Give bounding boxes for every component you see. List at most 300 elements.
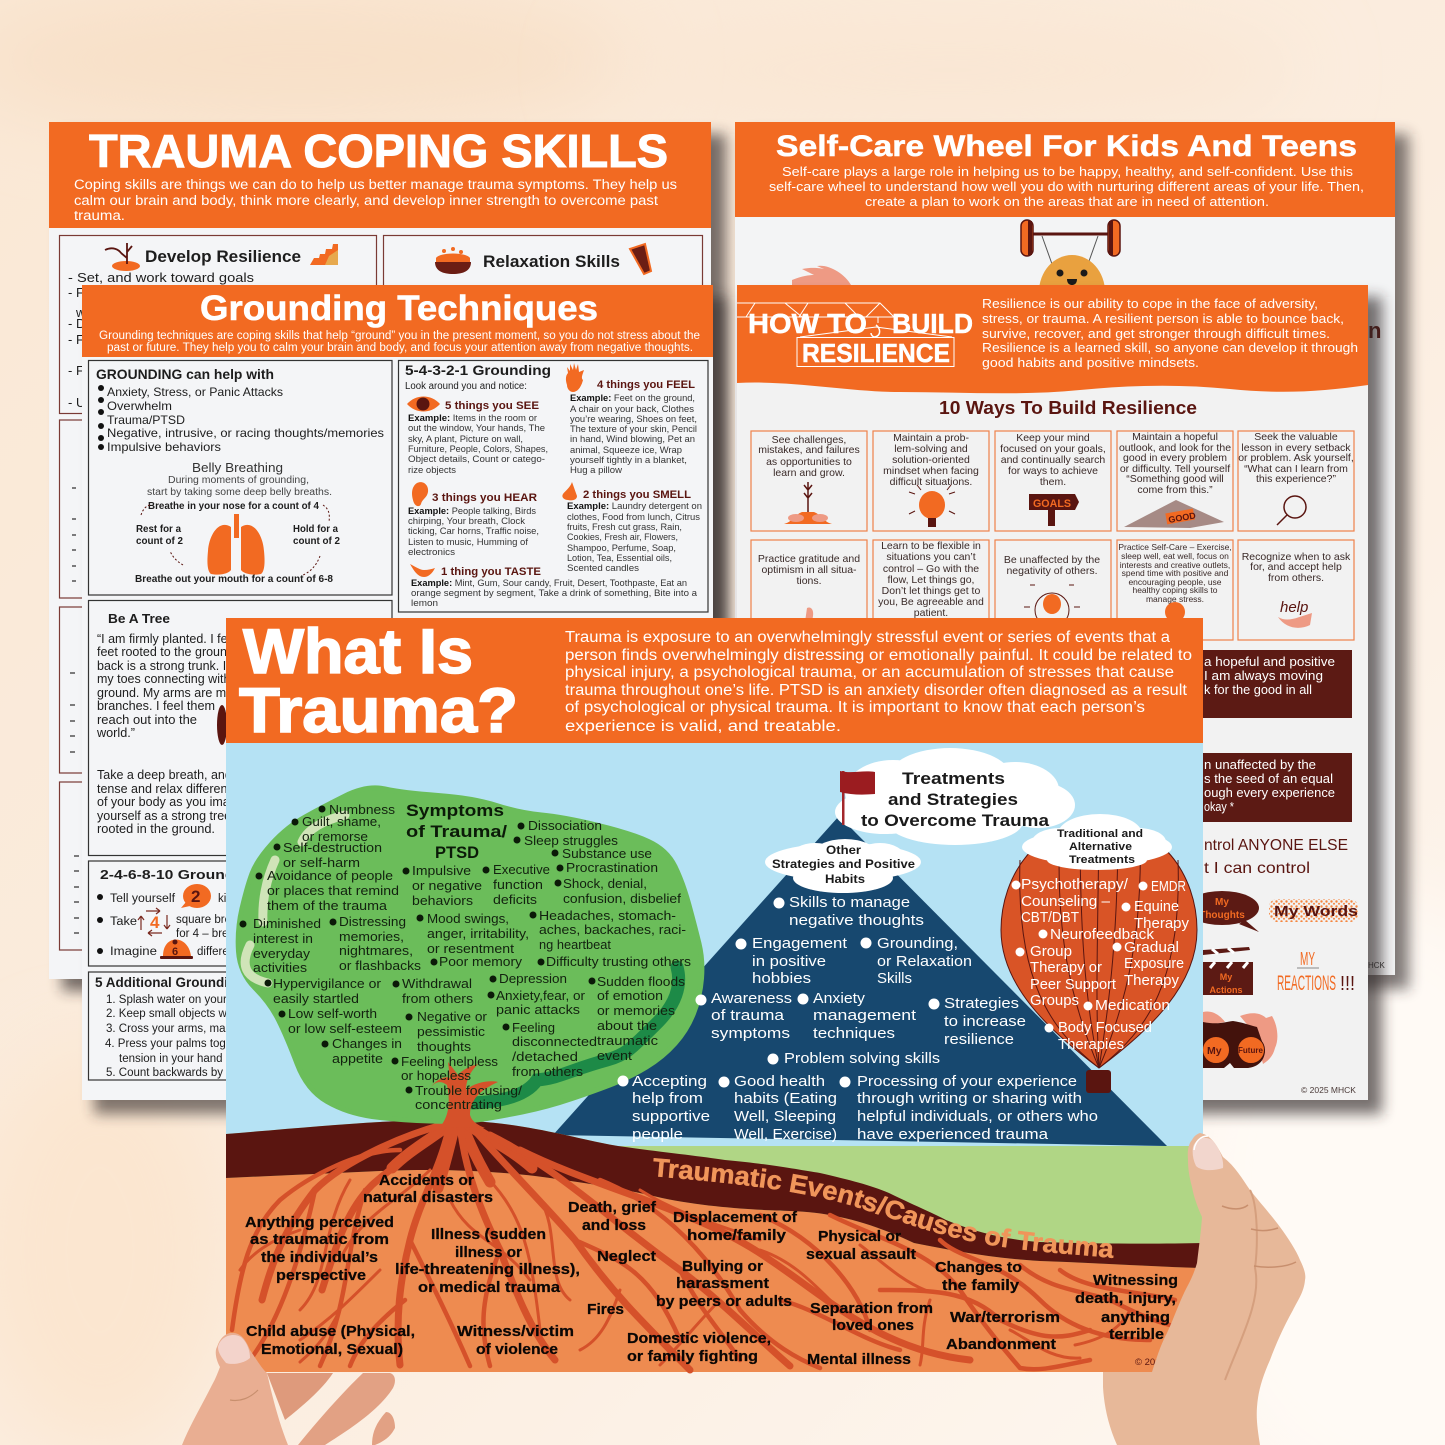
symptom text: Mood swings, — [427, 911, 509, 926]
symptom text: or low self-esteem — [288, 1021, 402, 1036]
symptom text: Changes in — [332, 1036, 402, 1051]
balloon text: Exposure — [1124, 956, 1184, 972]
mountain strategy list — [618, 894, 1098, 1143]
coping description: calm our brain and body, think more clearly, and develop inner strength to overcome past — [74, 193, 658, 208]
my reactions: MY — [1300, 949, 1315, 969]
mountain strategy list: to increase — [944, 1013, 1026, 1030]
my words: My Words — [1274, 903, 1358, 920]
symptom text: /detached — [512, 1049, 578, 1064]
cards row 1: as opportunities to — [766, 456, 852, 468]
symptom text: everyday — [253, 946, 311, 961]
highlights — [245, 815, 345, 983]
symptom text — [253, 802, 692, 1112]
poster: trauma coping skills — [49, 122, 726, 991]
panel: 2-4-6-8-10 grounding: different — [197, 946, 239, 958]
panel: be a tree: Be A Tree — [108, 611, 170, 626]
dark banner: hopeful — [1100, 650, 1352, 718]
cards row 2: Don’t let things get to — [882, 585, 980, 597]
symptom text: function — [493, 877, 543, 892]
cards row 1: Maintain a hopeful — [1132, 431, 1218, 443]
panel: 5-4-3-2-1 grounding — [398, 360, 708, 612]
panel: 5 additional grounding: 5 Additional Grounding — [95, 975, 244, 990]
symptom text: Sleep struggles — [524, 833, 619, 848]
symptom text: or remorse — [302, 829, 368, 844]
panel: relaxation skills — [384, 236, 702, 296]
panel: 5 additional grounding: 3. Cross your arms, mak — [106, 1023, 231, 1035]
cards row 2: manage stress. — [1146, 594, 1204, 604]
mountain strategy list: Skills to manage — [789, 894, 910, 911]
balloon text: Therapy — [1124, 973, 1180, 989]
my thoughts bubble: Thoughts — [1199, 910, 1245, 921]
symptoms heading: of Trauma/ — [406, 822, 507, 841]
symptom text: or resentment — [427, 941, 514, 956]
cloud: treatments and strategies — [835, 748, 1075, 845]
panel: 5-4-3-2-1 grounding: Example: Items in the room or — [408, 413, 537, 423]
panel: 5-4-3-2-1 grounding: Lotion, Tea, Essential oils, — [567, 553, 672, 563]
symptom text: easily startled — [273, 991, 359, 1006]
panel: 5-4-3-2-1 grounding: The texture of your skin, Pencil — [570, 424, 697, 434]
panel: grounding can help with — [88, 360, 392, 595]
intro paragraph: experience is valid, and treatable. — [565, 718, 841, 735]
symptom text: behaviors — [412, 893, 474, 908]
cards row 2: negativity of others. — [1006, 565, 1098, 577]
mountain strategy list: Engagement — [752, 935, 848, 952]
resilience description: survive, recover, and get stronger through difficult times. — [982, 326, 1330, 341]
cards row 2: Practice Self-Care – Exercise, — [1118, 542, 1232, 552]
cards row 1: Keep your mind — [1016, 432, 1090, 444]
causes of trauma list: terrible — [1109, 1326, 1164, 1343]
cards row 2: tions. — [796, 575, 822, 587]
balloon text: Neurofeedback — [1050, 927, 1155, 943]
cards row 1: “Something good will — [1126, 473, 1224, 485]
self-care description: Self-care plays a large role in helping us to be happy, healthy, and self-confident. Use this — [782, 164, 1354, 179]
resilience description: stress, or trauma. A resilient person is able to bounce back, — [982, 311, 1344, 326]
balloon text: Therapy — [1134, 916, 1190, 932]
panel: 5-4-3-2-1 grounding: 5 things you SEE — [445, 400, 539, 412]
symptom text: Negative or — [417, 1009, 488, 1024]
panel: 5-4-3-2-1 grounding: Look around you and notice: — [405, 381, 527, 392]
belly breathing diagram — [135, 460, 340, 585]
panel: be a tree: of your body as you imagine — [97, 795, 253, 809]
icon: square breath 4: 4 — [150, 913, 160, 932]
cards row 1: outlook, and look for the — [1119, 442, 1231, 454]
panel: be a tree: Take a deep breath, and — [97, 768, 232, 782]
icon: cloche 6: 6 — [172, 946, 178, 958]
mountain strategy list: or Relaxation — [877, 953, 972, 970]
mountain strategy list: in positive — [752, 953, 826, 970]
panel: be a tree: rooted in the ground. — [97, 822, 215, 836]
panel: 2-4-6-8-10 grounding — [88, 861, 392, 966]
symptom text: Withdrawal — [402, 976, 472, 991]
finger: middle — [298, 1373, 395, 1445]
panel: 5 additional grounding: 4. Press your palms toge — [105, 1038, 232, 1050]
mountain strategy list: people — [632, 1126, 683, 1143]
panel: be a tree: back is a strong trunk. I feel — [97, 659, 250, 673]
causes of trauma list: Physical or — [818, 1228, 901, 1245]
panel: develop resilience: - U — [68, 395, 85, 410]
tree crown — [238, 788, 702, 1128]
belly breathing diagram: Hold for a — [293, 523, 338, 535]
causes of trauma list: illness or — [455, 1244, 522, 1261]
cards row 2: control – Go with the — [883, 563, 979, 575]
intro paragraph: Trauma is exposure to an overwhelmingly stressful event or series of events that a — [565, 629, 1170, 646]
icon: goals sign: GOALS — [1033, 498, 1071, 510]
intro paragraph: physical injury, a psychological trauma, or an accumulation of stresses that cause — [565, 664, 1174, 681]
mountain strategy list: Awareness — [711, 990, 792, 1007]
causes of trauma list: anything — [1101, 1309, 1170, 1326]
main title — [239, 617, 518, 746]
panel: 5 additional grounding: 1. Splash water on your — [106, 994, 227, 1006]
coping description — [74, 177, 677, 223]
dark banner: unaffected: okay * — [1204, 799, 1234, 814]
cloud: traditional and alternative: Treatments — [1069, 854, 1135, 866]
symptom text: Procrastination — [566, 860, 658, 875]
balloon text: Groups — [1030, 993, 1079, 1009]
causes of trauma list: Witnessing — [1093, 1272, 1178, 1289]
grounding description: Grounding techniques are coping skills that help “ground” you in the present moment, so you do not stress about the — [99, 330, 700, 342]
balloon text: EMDR — [1151, 879, 1186, 895]
symptom text: Difficulty trusting others — [546, 954, 692, 969]
symptom text: Headaches, stomach- — [539, 908, 676, 923]
control text — [1204, 837, 1348, 877]
panel: be a tree: my toes connecting with the — [97, 672, 251, 686]
causes of trauma list: Separation from — [810, 1300, 933, 1317]
causes of trauma list: Fires — [587, 1301, 624, 1318]
my future binoculars: My — [1207, 1045, 1222, 1057]
belly breathing diagram: Belly Breathing — [192, 460, 283, 475]
my actions clapboard — [1203, 947, 1253, 995]
cards row 2: encouraging people, use — [1128, 577, 1222, 587]
icon: help hand — [1278, 599, 1312, 628]
cards row 1: this experience?” — [1256, 473, 1336, 485]
symptom text: Sudden floods — [597, 974, 686, 989]
belly breathing diagram: count of 2 — [293, 535, 340, 547]
causes of trauma list: Emotional, Sexual) — [261, 1341, 403, 1358]
cards row 2: Practice gratitude and — [758, 553, 860, 565]
cloud: treatments and strategies: and Strategies — [888, 790, 1018, 809]
mountain strategy list: Good health — [734, 1073, 825, 1090]
cloud: treatments and strategies: Treatments — [902, 769, 1005, 788]
cards row 1: Seek the valuable — [1254, 431, 1338, 443]
self-care description: create a plan to work on the areas that are in need of attention. — [865, 194, 1269, 209]
panel: develop resilience — [60, 236, 376, 414]
cards row 1: or difficulty. Tell yourself — [1120, 463, 1230, 475]
cards row 2: spend time with positive and — [1122, 568, 1229, 578]
symptom text: from others — [512, 1064, 584, 1079]
dark banner: hopeful: I am always moving — [1204, 668, 1323, 683]
panel: 5-4-3-2-1 grounding: A chair on your back, Clothes — [570, 404, 694, 414]
panel: be a tree: branches. I feel them — [97, 699, 215, 713]
icon: help hand: help — [1280, 599, 1308, 616]
panel: develop resilience: - D — [68, 316, 85, 331]
hot air balloon — [1001, 822, 1197, 1093]
my words — [1269, 899, 1358, 922]
icon: cloche 6 — [160, 940, 193, 959]
icon: hand — [566, 363, 584, 392]
my actions clapboard: Actions — [1209, 985, 1243, 995]
intro paragraph — [565, 629, 1192, 735]
causes of trauma list: perspective — [276, 1267, 366, 1284]
cards row 1: Maintain a prob- — [893, 432, 969, 444]
panel: 5-4-3-2-1 grounding: electronics — [408, 547, 455, 557]
panel: grounding can help with: Trauma/PTSD — [107, 413, 185, 427]
dark banner: unaffected: s the seed of an equal — [1204, 771, 1333, 786]
trunk and branches — [430, 1062, 498, 1128]
belly breathing diagram: During moments of grounding, — [168, 475, 309, 486]
panel: 5 additional grounding — [88, 972, 392, 1080]
panel: be a tree: “I am firmly planted. I feel my — [97, 632, 258, 646]
header bar — [226, 617, 1203, 746]
cards row 2 — [751, 540, 1354, 640]
panel: be a tree: tense and relax different parts — [97, 782, 262, 796]
cards row 1: solution-oriented — [892, 454, 970, 466]
mountain strategy list: Well, Sleeping — [734, 1108, 836, 1125]
panel: 5 additional grounding: 5. Count backwards by — [106, 1067, 223, 1079]
icon: speech bubble 2 — [181, 884, 211, 908]
mountain strategy list: resilience — [944, 1031, 1014, 1048]
symptom text: Poor memory — [439, 954, 523, 969]
panel: 5-4-3-2-1 grounding: fruits, Fresh cut grass, Rain, — [567, 522, 682, 532]
symptom text: or flashbacks — [339, 958, 422, 973]
panel: 5-4-3-2-1 grounding: Scented candles — [567, 563, 639, 573]
symptoms heading: PTSD — [435, 843, 479, 862]
symptom text: Avoidance of people — [267, 868, 393, 883]
mountain strategy list: Strategies — [944, 995, 1019, 1012]
balloon text: Gradual — [1124, 940, 1179, 956]
cards row 2: sleep well, eat well, focus on — [1121, 551, 1229, 561]
causes of trauma list: War/terrorism — [950, 1309, 1060, 1326]
cards row 2: patient. — [914, 607, 948, 619]
coping title: TRAUMA COPING SKILLS — [89, 125, 668, 177]
panel: 2-4-6-8-10 grounding: for 4 – breathe — [176, 928, 251, 940]
panel: develop resilience: - Set, and work toward goals — [68, 270, 255, 285]
poster: how to build resilience — [737, 285, 1382, 1114]
balloon text: Therapy or — [1030, 960, 1102, 976]
causes of trauma list: loved ones — [832, 1317, 914, 1334]
symptom text: nightmares, — [339, 943, 413, 958]
cards row 2: interests and creative outlets, — [1120, 560, 1230, 570]
icon: good word heap: GOOD — [1168, 510, 1197, 525]
mountain strategy list: Anxiety — [813, 990, 866, 1007]
symptom text: Low self-worth — [288, 1006, 377, 1021]
panel: 5-4-3-2-1 grounding: Object details, Count or catego- — [408, 454, 545, 464]
my future binoculars: Future — [1238, 1046, 1263, 1055]
panel: 5-4-3-2-1 grounding: Hug a pillow — [570, 465, 622, 475]
band heading: Traumatic Events/Causes of Trauma — [653, 1158, 1114, 1258]
cloud: traditional and alternative — [1022, 814, 1172, 870]
panel: 2-4-6-8-10 grounding: kind — [218, 893, 239, 905]
palm and thumb — [182, 1333, 288, 1445]
balloon bullets — [1012, 880, 1148, 1032]
mountain strategy list: Well, Exercise) — [734, 1126, 837, 1143]
panel: grounding can help with: GROUNDING can help with — [96, 366, 274, 382]
symptom text: interest in — [253, 931, 313, 946]
mountain strategy list: negative thoughts — [789, 912, 924, 929]
mountain strategy list: techniques — [813, 1025, 895, 1042]
causes of trauma list: of violence — [476, 1341, 558, 1358]
cards row 1: for ways to achieve — [1008, 465, 1098, 477]
mountain strategy list: Grounding, — [877, 935, 958, 952]
icon: lips — [410, 564, 435, 577]
panel: 5-4-3-2-1 grounding: 1 thing you TASTE — [441, 566, 541, 578]
dark banner: hopeful: k for the good in all — [1204, 682, 1312, 697]
cards row 1: lesson in every setback — [1241, 442, 1351, 454]
cloud: traditional and alternative: Alternative — [1069, 841, 1132, 853]
poster: grounding techniques — [82, 285, 727, 1114]
panel: 5-4-3-2-1 grounding: 5-4-3-2-1 Grounding — [405, 362, 551, 378]
panel: 5-4-3-2-1 grounding: animal, Squeeze ice, Wrap — [570, 445, 682, 455]
panel: develop resilience: - F — [68, 363, 84, 378]
logo: how to build resilience: BUILD — [892, 308, 973, 339]
poster: what is trauma — [226, 617, 1203, 1374]
symptom text: or places that remind — [267, 883, 399, 898]
symptom text: or self-harm — [283, 855, 360, 870]
mountain strategy list: Accepting — [632, 1073, 707, 1090]
poster: self-care wheel: n — [1368, 318, 1381, 343]
cards row 1: focused on your goals, — [1000, 443, 1106, 455]
cloud: other strategies — [765, 839, 921, 893]
panels: hidden left boxes — [60, 420, 160, 950]
panel: 5-4-3-2-1 grounding: 4 things you FEEL — [597, 379, 695, 391]
cards row 2: from others. — [1268, 572, 1324, 584]
logo: how to build resilience — [737, 303, 973, 368]
mountain strategy list: have experienced trauma — [857, 1126, 1049, 1143]
grounding title: Grounding Techniques — [200, 289, 598, 328]
causes of trauma list: Anything perceived — [245, 1214, 394, 1231]
symptom text: deficits — [493, 892, 538, 907]
cloud: traditional and alternative: Traditional and — [1057, 828, 1143, 840]
icon: stairs — [310, 244, 338, 265]
icon: heart talk — [1165, 602, 1185, 622]
symptom bullets — [240, 806, 596, 1094]
my thoughts bubble: My — [1215, 897, 1229, 908]
causes of trauma list: Illness (sudden — [431, 1226, 546, 1243]
my reactions: !!! — [1340, 973, 1355, 995]
causes of trauma list: Abandonment — [946, 1336, 1056, 1353]
poster: self-care wheel: HCK — [1368, 961, 1386, 970]
resilience description: Resilience is a learned skill, so anyone can develop it through — [982, 340, 1358, 355]
ground — [226, 1121, 1202, 1372]
causes of trauma list: home/family — [687, 1227, 787, 1244]
panel: 5-4-3-2-1 grounding: orange segment by segment, Take a drink of something, Bite into a — [411, 588, 698, 598]
icon: magnifier — [1277, 496, 1306, 525]
icon: speech bubble 2: 2 — [191, 887, 200, 906]
panel: 5-4-3-2-1 grounding: in hand, Wind blowing, Pet an — [570, 434, 695, 444]
causes of trauma list: Neglect — [597, 1248, 656, 1265]
left hand — [182, 1333, 395, 1445]
causes of trauma list: the family — [942, 1277, 1020, 1294]
my actions clapboard: My — [1220, 972, 1232, 982]
control text: ntrol ANYONE ELSE — [1204, 837, 1348, 854]
causes of trauma list: Displacement of — [673, 1209, 798, 1226]
symptom text: from others — [402, 991, 474, 1006]
panel: 5-4-3-2-1 grounding: Example: People talking, Birds — [408, 506, 536, 516]
causes of trauma list: Changes to — [935, 1259, 1022, 1276]
symptom text: Hypervigilance or — [273, 976, 382, 991]
panel: be a tree: ground. My arms are my — [97, 686, 233, 700]
causes of trauma list — [245, 1172, 1178, 1368]
symptom text: them of the trauma — [267, 898, 388, 913]
mountain strategy list: Skills — [877, 970, 912, 987]
symptoms heading: Symptoms — [406, 801, 504, 820]
symptom text: pessimistic — [417, 1024, 486, 1039]
cards row 1: good in every problem — [1123, 452, 1227, 464]
cloud: other strategies: Other — [826, 843, 861, 857]
symptom text: aches, backaches, raci- — [539, 922, 686, 937]
belly breathing diagram: count of 2 — [136, 535, 183, 547]
cards row 1 — [751, 431, 1354, 531]
symptom text: anger, irritability, — [427, 926, 529, 941]
symptom text: Substance use — [562, 846, 652, 861]
cards row 2: situations you can’t — [886, 551, 976, 563]
panel: 5-4-3-2-1 grounding: Furniture, People, Colors, Shapes, — [408, 444, 548, 454]
my reactions: REACTIONS — [1277, 972, 1336, 995]
belly breathing diagram: Breathe out your mouth for a count of 6-8 — [135, 573, 333, 585]
panel: relaxation skills: Relaxation Skills — [483, 252, 620, 271]
symptom text: ng heartbeat — [539, 937, 611, 952]
belly breathing diagram: Rest for a — [136, 523, 181, 535]
panel: be a tree: feet rooted to the ground, my — [97, 645, 258, 659]
cards row 2: Learn to be flexible in — [881, 540, 981, 552]
causes of trauma list: or medical trauma — [418, 1279, 561, 1296]
panel: 5-4-3-2-1 grounding: chirping, Your breath, Clock — [408, 516, 525, 526]
self-care description: self-care wheel to understand how well you do with nurturing different areas of your life. Then, — [769, 179, 1364, 194]
panel: 5-4-3-2-1 grounding: rize objects — [408, 465, 456, 475]
panel: 2-4-6-8-10 grounding: Imagine — [110, 946, 157, 958]
cards row 2: healthy coping skills to — [1132, 585, 1218, 595]
symptom text: or hopeless — [401, 1068, 472, 1083]
cards row 2: flow, Let things go, — [888, 574, 974, 586]
panel: 5-4-3-2-1 grounding: out the window, Your hands, The — [408, 423, 545, 433]
balloon text: Medication — [1095, 998, 1170, 1014]
mountain strategy list: of trauma — [711, 1007, 785, 1024]
panel: 5-4-3-2-1 grounding: yourself tightly in a blanket, — [570, 455, 687, 465]
panel: grounding can help with: Overwhelm — [107, 399, 172, 413]
resilience description: Resilience is our ability to cope in the face of adversity, — [982, 296, 1318, 311]
right hand — [1103, 1133, 1305, 1445]
mountain strategy list: help from — [632, 1090, 703, 1107]
symptom text: appetite — [332, 1051, 383, 1066]
mountain strategy list: symptoms — [711, 1025, 790, 1042]
panel: 5-4-3-2-1 grounding: ticking, Car horns, Traffic noise, — [408, 526, 539, 536]
resilience description: good habits and positive mindsets. — [982, 355, 1199, 370]
cards row 2: for, and accept help — [1250, 561, 1342, 573]
mountain — [553, 816, 1167, 1146]
panel: 5-4-3-2-1 grounding: sky, A plant, Picture on wall, — [408, 434, 523, 444]
causes of trauma list: life-threatening illness), — [395, 1261, 580, 1278]
panel: 5-4-3-2-1 grounding: lemon — [411, 598, 438, 608]
panel: be a tree: reach out into the — [97, 713, 197, 727]
logo: how to build resilience: RESILIENCE — [802, 338, 950, 368]
cards row 2: optimism in all situa- — [761, 564, 857, 576]
intro paragraph: trauma throughout one’s life. PTSD is an anxiety disorder often diagnosed as a result — [565, 682, 1188, 699]
balloon text: Psychotherapy/ — [1021, 877, 1129, 893]
dark banner: unaffected: ough every experience — [1204, 785, 1335, 800]
cards row 1: mindset when facing — [883, 465, 979, 477]
cards row 1: See challenges, — [772, 434, 846, 446]
symptom text: Guilt, shame, — [302, 814, 381, 829]
causes of trauma list: Accidents or — [379, 1172, 474, 1189]
symptom text: Impulsive — [412, 863, 471, 878]
self-care description — [769, 164, 1364, 209]
panel: 5 additional grounding: tension in your hand — [119, 1053, 223, 1065]
heading: 10 ways: 10 Ways To Build Resilience — [939, 398, 1197, 418]
mountain strategy list: through writing or sharing with — [857, 1090, 1082, 1107]
icon: eye — [407, 396, 440, 412]
symptom text: or memories — [597, 1003, 676, 1018]
balloon text: Therapies — [1058, 1037, 1124, 1053]
panel: develop resilience: - F — [68, 332, 84, 347]
